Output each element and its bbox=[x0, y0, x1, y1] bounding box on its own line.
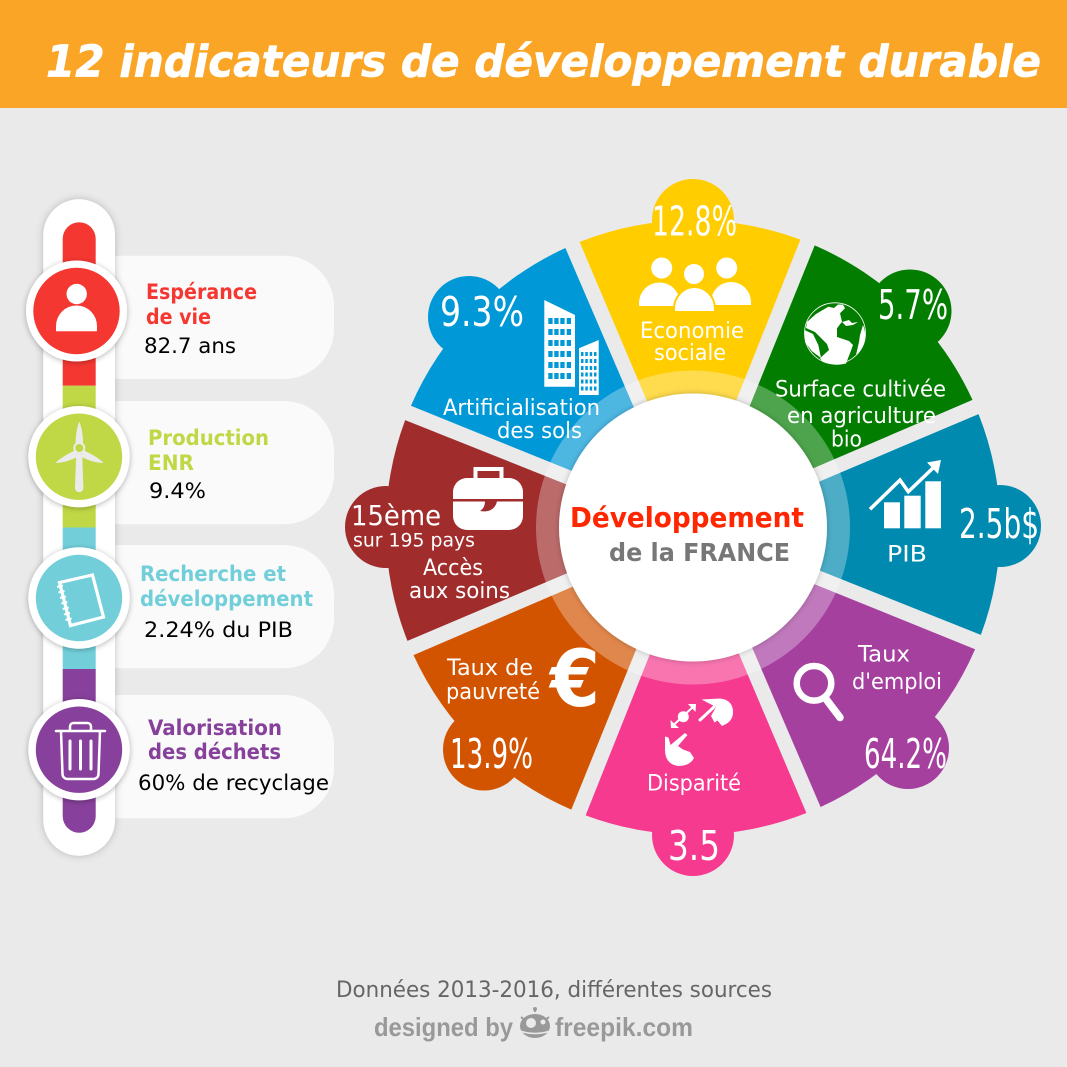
text: Valorisation des déchets: Valorisation bbox=[148, 716, 282, 741]
segment: Accès aux soins: Accès bbox=[423, 556, 483, 581]
footer credit: freepik.com bbox=[555, 1012, 693, 1042]
chart: radial wheel bbox=[345, 179, 1041, 876]
sector: pink bbox=[583, 545, 807, 876]
segment: Economie sociale bbox=[639, 198, 751, 366]
text: Valorisation des déchets: 60% de recyclage bbox=[138, 771, 329, 796]
title: 12 indicateurs de développement durable bbox=[46, 36, 1041, 88]
icon: people bbox=[639, 258, 751, 312]
sector: maroon bbox=[345, 417, 676, 641]
text: Espérance de vie: Espérance bbox=[146, 280, 257, 305]
segment: Accès aux soins bbox=[351, 467, 523, 604]
center title: Développement bbox=[570, 501, 804, 534]
icon: globe bbox=[804, 303, 866, 365]
sector: blue bbox=[396, 234, 757, 594]
segment: Taux de pauvreté bbox=[446, 635, 600, 778]
card: Recherche et développement bbox=[70, 545, 334, 668]
icon: buildings bbox=[544, 300, 599, 395]
card: Valorisation des déchets bbox=[70, 695, 334, 818]
footer credit bbox=[374, 1007, 693, 1042]
text: Production ENR: ENR bbox=[148, 451, 194, 476]
segment: Artificialisation des sols: Artificialisation bbox=[443, 396, 600, 421]
central white disc bbox=[559, 394, 827, 662]
sector: purple bbox=[629, 461, 990, 821]
text: Valorisation des déchets bbox=[138, 716, 329, 796]
segment: Disparité: 3.5 bbox=[668, 822, 720, 870]
segment: Disparité bbox=[647, 698, 741, 870]
segment: Artificialisation des sols: des sols bbox=[497, 419, 582, 444]
card: Production ENR bbox=[70, 401, 334, 524]
text: Production ENR: 9.4% bbox=[149, 479, 206, 504]
text: Recherche et développement: 2.24% du PIB bbox=[144, 618, 293, 643]
segment: Economie sociale: 12.8% bbox=[652, 198, 737, 246]
segment: Accès aux soins: 15ème bbox=[351, 499, 441, 532]
text: Recherche et développement: développement bbox=[140, 587, 313, 612]
icon: growth chart bbox=[870, 460, 941, 528]
icon: toolbox bbox=[453, 467, 523, 530]
text: Valorisation des déchets: des déchets bbox=[148, 740, 281, 765]
segment: Taux de pauvreté: Taux de bbox=[446, 656, 533, 681]
white vertical capsule bbox=[43, 199, 115, 856]
segment: Surface cultivée: en agriculture bbox=[787, 404, 936, 429]
segment: Economie sociale: Economie bbox=[640, 319, 744, 344]
segment: Taux d'emploi: Taux bbox=[857, 643, 910, 668]
segment: Accès aux soins: sur 195 pays bbox=[353, 530, 475, 552]
icon: euro: € bbox=[548, 635, 600, 725]
icon: trash can bbox=[28, 699, 130, 800]
segment: Artificialisation des sols: 9.3% bbox=[440, 288, 524, 336]
center subtitle: de la FRANCE bbox=[609, 538, 790, 567]
icon: notebook bbox=[28, 547, 130, 649]
sector: yellow bbox=[579, 179, 803, 510]
sector: green bbox=[627, 231, 987, 592]
segment: Taux d'emploi: 64.2% bbox=[864, 730, 947, 778]
segment: Disparité: Disparité bbox=[647, 772, 741, 797]
text: Production ENR bbox=[148, 426, 269, 504]
icon: wind turbine bbox=[28, 406, 130, 507]
icon: person bbox=[26, 260, 127, 362]
panel: left indicators column bbox=[26, 199, 334, 856]
footer source note: Données 2013-2016, différentes sources bbox=[336, 978, 772, 1003]
icon: freepik robot bbox=[520, 1007, 550, 1038]
sector: teal bbox=[710, 414, 1041, 638]
segment: Artificialisation des sols bbox=[440, 288, 600, 444]
segment: Accès aux soins: aux soins bbox=[409, 579, 510, 604]
segment: PIB: PIB bbox=[887, 543, 927, 568]
segment: Surface cultivée: 5.7% bbox=[878, 281, 948, 329]
segment: Surface cultivée bbox=[775, 281, 948, 453]
text: Recherche et développement: Recherche et bbox=[140, 562, 286, 587]
card: Espérance de vie bbox=[70, 256, 334, 379]
sector: orange bbox=[399, 463, 759, 824]
text: Espérance de vie bbox=[144, 280, 257, 359]
footer credit: designed by bbox=[374, 1012, 513, 1042]
segment: Taux d'emploi bbox=[797, 643, 947, 778]
text: Production ENR: Production bbox=[148, 426, 269, 451]
segment: Taux de pauvreté: 13.9% bbox=[450, 730, 533, 778]
segment: Taux d'emploi: d'emploi bbox=[852, 670, 942, 695]
text: Espérance de vie: 82.7 ans bbox=[144, 334, 236, 359]
segment: Surface cultivée: bio bbox=[831, 428, 862, 453]
icon: touch gestures bbox=[665, 698, 733, 766]
segment: Taux de pauvreté: pauvreté bbox=[446, 680, 540, 705]
text: Recherche et développement bbox=[140, 562, 313, 643]
coloured vertical bar bbox=[63, 222, 96, 833]
translucent ring bbox=[536, 370, 850, 684]
text: Espérance de vie: de vie bbox=[146, 305, 211, 330]
segment: PIB bbox=[870, 460, 1039, 568]
icon: magnifier bbox=[797, 666, 840, 718]
segment: Surface cultivée: Surface cultivée bbox=[775, 378, 946, 403]
header band with title bbox=[0, 0, 1067, 108]
segment: Economie sociale: sociale bbox=[654, 341, 726, 366]
